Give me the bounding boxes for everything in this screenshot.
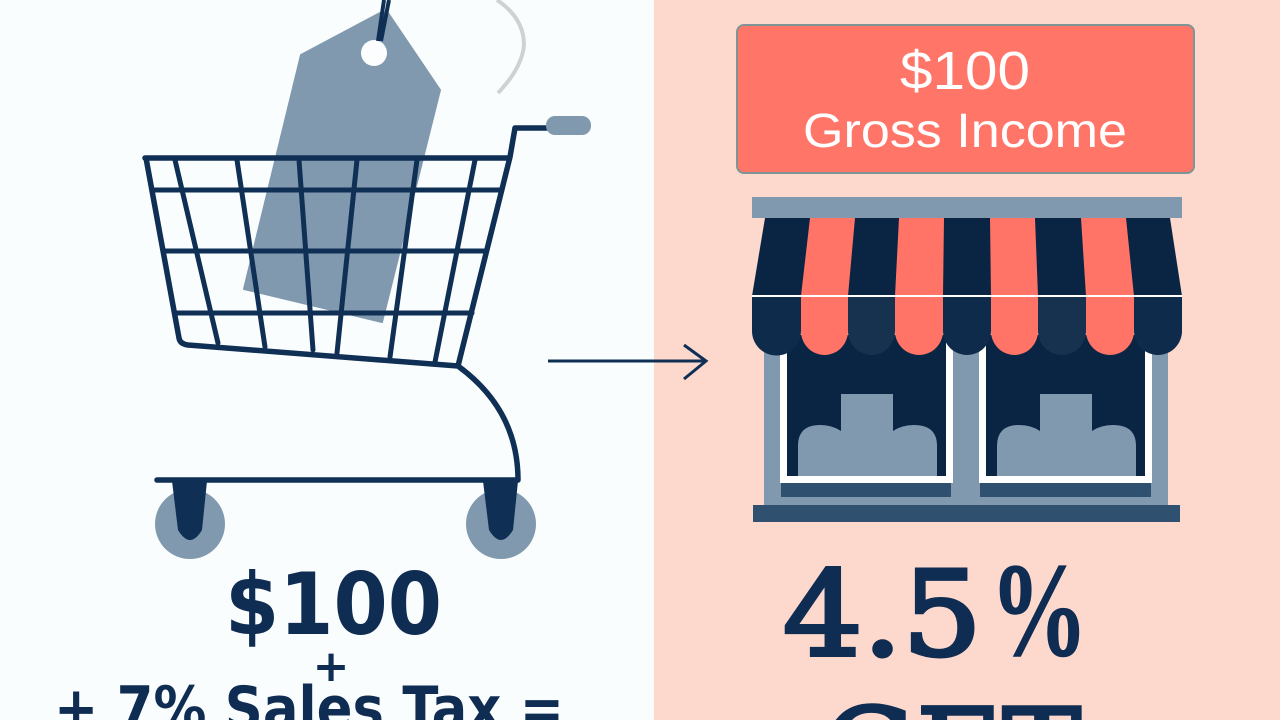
panel: customer side background [0, 0, 654, 720]
icon: price tag [244, 0, 524, 322]
GET rate heading: 4.5 [783, 546, 982, 683]
awning [752, 218, 1182, 355]
plus sign: + [313, 641, 349, 692]
store roof bar [752, 197, 1182, 218]
GET rate heading: % [990, 536, 1088, 684]
panel: business side background [654, 0, 1280, 720]
store base [753, 505, 1180, 522]
cart basket frame [145, 128, 547, 366]
price heading: $100 [225, 555, 442, 655]
banner: gross income [737, 25, 1194, 173]
banner: gross income: $100 [900, 41, 1030, 101]
right window [979, 335, 1152, 497]
cart right wheel [466, 481, 536, 559]
cart lower frame [157, 366, 518, 480]
banner: gross income: Gross Income [803, 105, 1127, 158]
cart basket grid [154, 160, 502, 362]
icon: storefront [752, 197, 1182, 522]
arrow: customer to business [548, 345, 706, 379]
building wall [764, 345, 1168, 505]
left window [780, 335, 953, 497]
cart handle grip [546, 116, 591, 135]
icon: shopping cart [145, 116, 591, 559]
cart left wheel [155, 481, 225, 559]
